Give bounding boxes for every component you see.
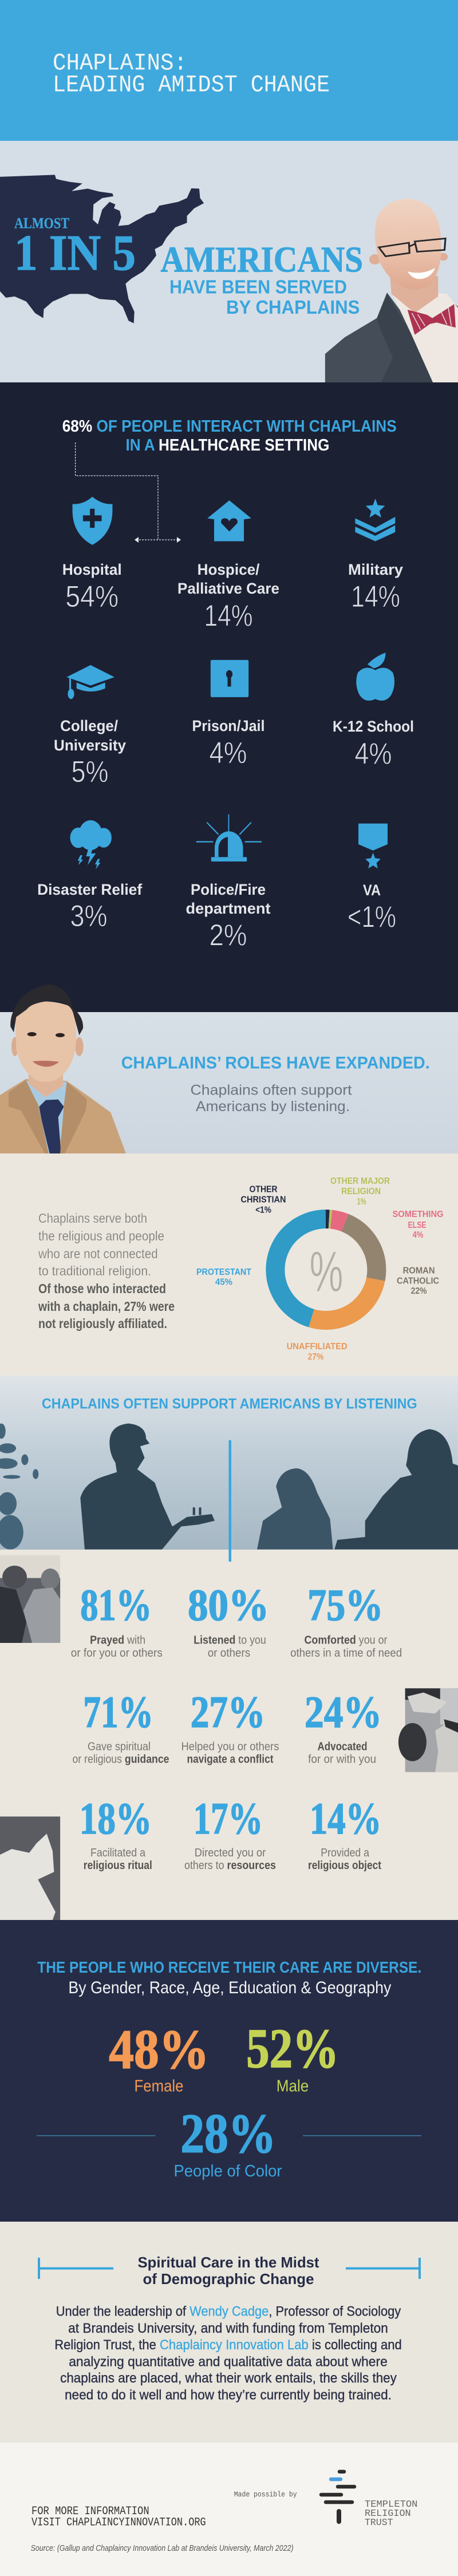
stat: police and fire: Police/Fire <box>191 881 266 898</box>
stat: female: 48% <box>109 2019 209 2081</box>
stat: prayed: Prayed with <box>90 1634 145 1646</box>
label: something else: 4% <box>412 1230 424 1240</box>
text block: chaplains are placed, what their work entails, the skills they <box>60 2370 397 2386</box>
stat: college: 5% <box>71 755 109 789</box>
text block: Religion Trust, the Chaplaincy Innovation Lab is collecting and <box>54 2337 402 2353</box>
icon: apple <box>356 653 394 701</box>
stat: conflict: 27% <box>191 1687 265 1737</box>
text block: to traditional religion. <box>38 1263 151 1278</box>
stat: female: Female <box>134 2077 183 2096</box>
stat: male: Male <box>277 2077 309 2096</box>
headline: almost 1 in 5 Americans: 1 IN 5 <box>14 226 136 281</box>
text: made possible by: Made possible by <box>234 2490 297 2499</box>
label: protestant <box>196 1267 251 1287</box>
title: CHAPLAINS: <box>53 49 187 77</box>
label: something else: SOMETHING <box>393 1210 443 1219</box>
panel: settings where people meet chaplains <box>0 382 458 1012</box>
label: other christian: <1% <box>255 1205 271 1215</box>
source note: Source: (Gallup and Chaplaincy Innovation Lab at Brandeis University, March 2022) <box>31 2543 294 2553</box>
stat: college: University <box>54 737 126 754</box>
donut chart: % <box>309 1240 344 1304</box>
icon: military chevrons <box>355 499 395 542</box>
logo: Templeton Religion Trust: RELIGION <box>365 2508 411 2519</box>
panel: religious affiliation <box>0 1153 458 1377</box>
panel: diversity of care recipients <box>0 1920 458 2222</box>
text block: Of those who interacted <box>38 1281 166 1296</box>
stat: VA: VA <box>363 882 381 899</box>
headline: almost 1 in 5 Americans: HAVE BEEN SERVED <box>169 276 347 298</box>
stat: disaster relief <box>37 881 143 933</box>
stat: disaster relief: 3% <box>70 899 108 933</box>
heading <box>62 417 397 455</box>
title: LEADING AMIDST CHANGE <box>53 71 330 98</box>
divider line <box>229 1440 231 1562</box>
photo: men praying <box>0 1555 60 1643</box>
stat: guidance <box>72 1687 169 1765</box>
heading: of Demographic Change <box>143 2270 314 2287</box>
panel: roles have expanded <box>0 985 458 1153</box>
stat: disaster relief: Disaster Relief <box>37 881 143 898</box>
stat: ritual <box>80 1793 152 1872</box>
heading: IN A HEALTHCARE SETTING <box>126 436 330 455</box>
stat: prayed <box>71 1580 163 1660</box>
panel: listening photo banner <box>0 1376 458 1562</box>
stat: resources <box>184 1793 276 1872</box>
stat: police and fire: 2% <box>210 918 247 953</box>
subheading: Chaplains often support <box>190 1082 352 1098</box>
label: roman catholic: ROMAN <box>403 1266 435 1275</box>
stat: listened: Listened to you <box>194 1634 266 1646</box>
stat: k-12 school: 4% <box>355 737 392 771</box>
label: something else: ELSE <box>408 1220 427 1230</box>
stat: advocated: for or with you <box>308 1753 376 1765</box>
stat: advocated <box>305 1687 382 1765</box>
icon: house with heart <box>207 500 251 542</box>
stat: male: 52% <box>246 2018 339 2080</box>
stat: religious object: Provided a <box>321 1847 370 1859</box>
label: other major religion: 1% <box>357 1197 366 1207</box>
stat: people of color: 28% <box>180 2103 276 2164</box>
text: more information: VISIT CHAPLAINCYINNOVATION.ORG <box>31 2516 206 2530</box>
photo: open book and hands <box>398 1688 458 1772</box>
label: unaffiliated: 27% <box>308 1352 324 1362</box>
headline: almost 1 in 5 Americans: AMERICANS <box>160 240 363 280</box>
label: other major religion: RELIGION <box>341 1187 381 1196</box>
photo: person kneeling in prayer <box>0 1816 60 1920</box>
label: unaffiliated: UNAFFILIATED <box>287 1342 348 1352</box>
stat: prison: Prison/Jail <box>192 717 264 734</box>
heading <box>137 2254 319 2287</box>
panel: what chaplains do <box>0 1550 458 1920</box>
portrait: smiling man in bow tie <box>325 199 458 382</box>
stat: listened: 80% <box>188 1580 269 1630</box>
label: other christian: CHRISTIAN <box>240 1195 286 1204</box>
logo: Templeton Religion Trust: TEMPLETON <box>365 2499 417 2510</box>
stat: comforted: others in a time of need <box>290 1647 402 1660</box>
text block: not religiously affiliated. <box>38 1316 167 1331</box>
text block: who are not connected <box>38 1246 158 1261</box>
icon: padlock keyhole <box>211 660 248 697</box>
stat: religious object <box>308 1793 381 1872</box>
heading: CHAPLAINS OFTEN SUPPORT AMERICANS BY LISTENING <box>42 1396 417 1412</box>
stat: religious object: 14% <box>310 1793 381 1843</box>
panel: title banner <box>0 0 458 141</box>
stat: guidance: 71% <box>83 1687 153 1737</box>
stat: hospice: Hospice/ <box>198 561 260 578</box>
logo: Templeton Religion Trust <box>321 2472 417 2528</box>
icon: graduation cap <box>66 665 114 699</box>
text block: Chaplains serve both <box>38 1211 147 1226</box>
logo: Templeton Religion Trust: TRUST <box>365 2518 393 2528</box>
stat: prayed: or for you or others <box>71 1647 163 1660</box>
stat: resources: others to resources <box>184 1859 276 1872</box>
heading: Spiritual Care in the Midst <box>137 2254 319 2271</box>
text block: Under the leadership of Wendy Cadge, Professor of Sociology <box>56 2304 401 2320</box>
subheading: Americans by listening. <box>196 1099 350 1115</box>
text block <box>54 2304 402 2403</box>
label: something else <box>393 1210 443 1240</box>
stat: male <box>246 2018 339 2096</box>
label: other christian <box>240 1185 286 1215</box>
stat: advocated: 24% <box>305 1687 382 1737</box>
stat: conflict: navigate a conflict <box>187 1753 274 1765</box>
stat: listened: or others <box>208 1647 250 1660</box>
text block <box>38 1211 175 1331</box>
headline: almost 1 in 5 Americans <box>14 215 363 318</box>
stat: k-12 school: K-12 School <box>333 718 414 735</box>
panel: footer <box>0 2443 458 2576</box>
headline: almost 1 in 5 Americans: ALMOST <box>14 215 69 232</box>
label: protestant: PROTESTANT <box>196 1267 251 1277</box>
icon: shield <box>73 497 112 545</box>
headline: almost 1 in 5 Americans: BY CHAPLAINS <box>226 297 360 318</box>
label: other major religion <box>330 1176 390 1207</box>
stat: conflict <box>181 1687 279 1765</box>
stat: ritual: 18% <box>80 1793 152 1843</box>
stat: college: College/ <box>60 717 119 734</box>
label: other major religion: OTHER MAJOR <box>330 1176 390 1186</box>
photo: silhouettes in conversation <box>0 1424 458 1550</box>
stat: college <box>54 717 126 789</box>
text: more information: FOR MORE INFORMATION <box>31 2505 149 2518</box>
stat: people of color <box>174 2103 282 2180</box>
icon: emergency siren <box>196 815 262 862</box>
text block: with a chaplain, 27% were <box>38 1299 175 1314</box>
stat: VA <box>348 882 396 934</box>
subheading: By Gender, Race, Age, Education & Geography <box>68 1978 391 1997</box>
stat: hospital: Hospital <box>62 561 122 578</box>
stat: religious object: religious object <box>308 1859 381 1872</box>
stat: comforted <box>290 1580 402 1660</box>
stat: advocated: Advocated <box>317 1741 368 1753</box>
stat: hospital <box>62 561 122 614</box>
stat: ritual: Facilitated a <box>90 1847 146 1859</box>
heading: 68% OF PEOPLE INTERACT WITH CHAPLAINS <box>62 417 397 436</box>
stat: comforted: Comforted you or <box>305 1634 388 1646</box>
stat: guidance: or religious guidance <box>72 1753 169 1765</box>
stat: resources: 17% <box>194 1793 263 1843</box>
map of the United States <box>0 175 204 323</box>
stat: military: 14% <box>351 580 400 614</box>
stat: military: Military <box>348 561 403 578</box>
label: roman catholic: CATHOLIC <box>397 1276 439 1286</box>
stat: military <box>348 561 403 614</box>
label: roman catholic: 22% <box>411 1286 427 1296</box>
text block: at Brandeis University, and with funding from Templeton <box>68 2321 388 2336</box>
arrow: healthcare bracket <box>76 442 181 543</box>
stat: ritual: religious ritual <box>84 1859 152 1872</box>
stat: prison <box>192 717 264 770</box>
subheading <box>190 1082 352 1115</box>
title <box>53 49 330 98</box>
stat: conflict: Helped you or others <box>181 1741 279 1753</box>
portrait: man in tan jacket <box>0 985 126 1153</box>
stat: prison: 4% <box>210 736 247 770</box>
stat: police and fire <box>185 881 271 953</box>
stat: hospital: 54% <box>65 580 119 614</box>
stat: hospice <box>177 561 279 633</box>
text block: the religious and people <box>38 1228 164 1243</box>
label: protestant: 45% <box>215 1278 232 1287</box>
label: unaffiliated <box>287 1342 348 1362</box>
panel: spiritual care in demographic change <box>0 2222 458 2443</box>
label: roman catholic <box>397 1266 439 1296</box>
stat: hospice: Palliative Care <box>177 580 279 597</box>
icon: storm cloud <box>70 820 112 869</box>
stat: guidance: Gave spiritual <box>88 1741 151 1753</box>
icon: medal <box>358 824 388 868</box>
text block: analyzing quantitative and qualitative data about where <box>69 2354 388 2370</box>
stat: prayed: 81% <box>80 1580 152 1630</box>
text: more information <box>31 2505 206 2530</box>
stat: comforted: 75% <box>307 1580 383 1630</box>
stat: listened <box>188 1580 269 1660</box>
text block: need to do it well and how they’re currently being trained. <box>65 2387 392 2403</box>
label: other christian: OTHER <box>250 1185 278 1195</box>
stat: resources: Directed you or <box>195 1847 266 1859</box>
stat: VA: <1% <box>348 900 396 934</box>
donut chart <box>275 1219 377 1320</box>
stat: k-12 school <box>333 718 414 771</box>
panel: one in five hero <box>0 141 458 382</box>
stat: hospice: 14% <box>204 599 253 633</box>
heading: CHAPLAINS’ ROLES HAVE EXPANDED. <box>121 1053 430 1073</box>
stat: people of color: People of Color <box>174 2162 282 2180</box>
stat: police and fire: department <box>185 900 271 917</box>
